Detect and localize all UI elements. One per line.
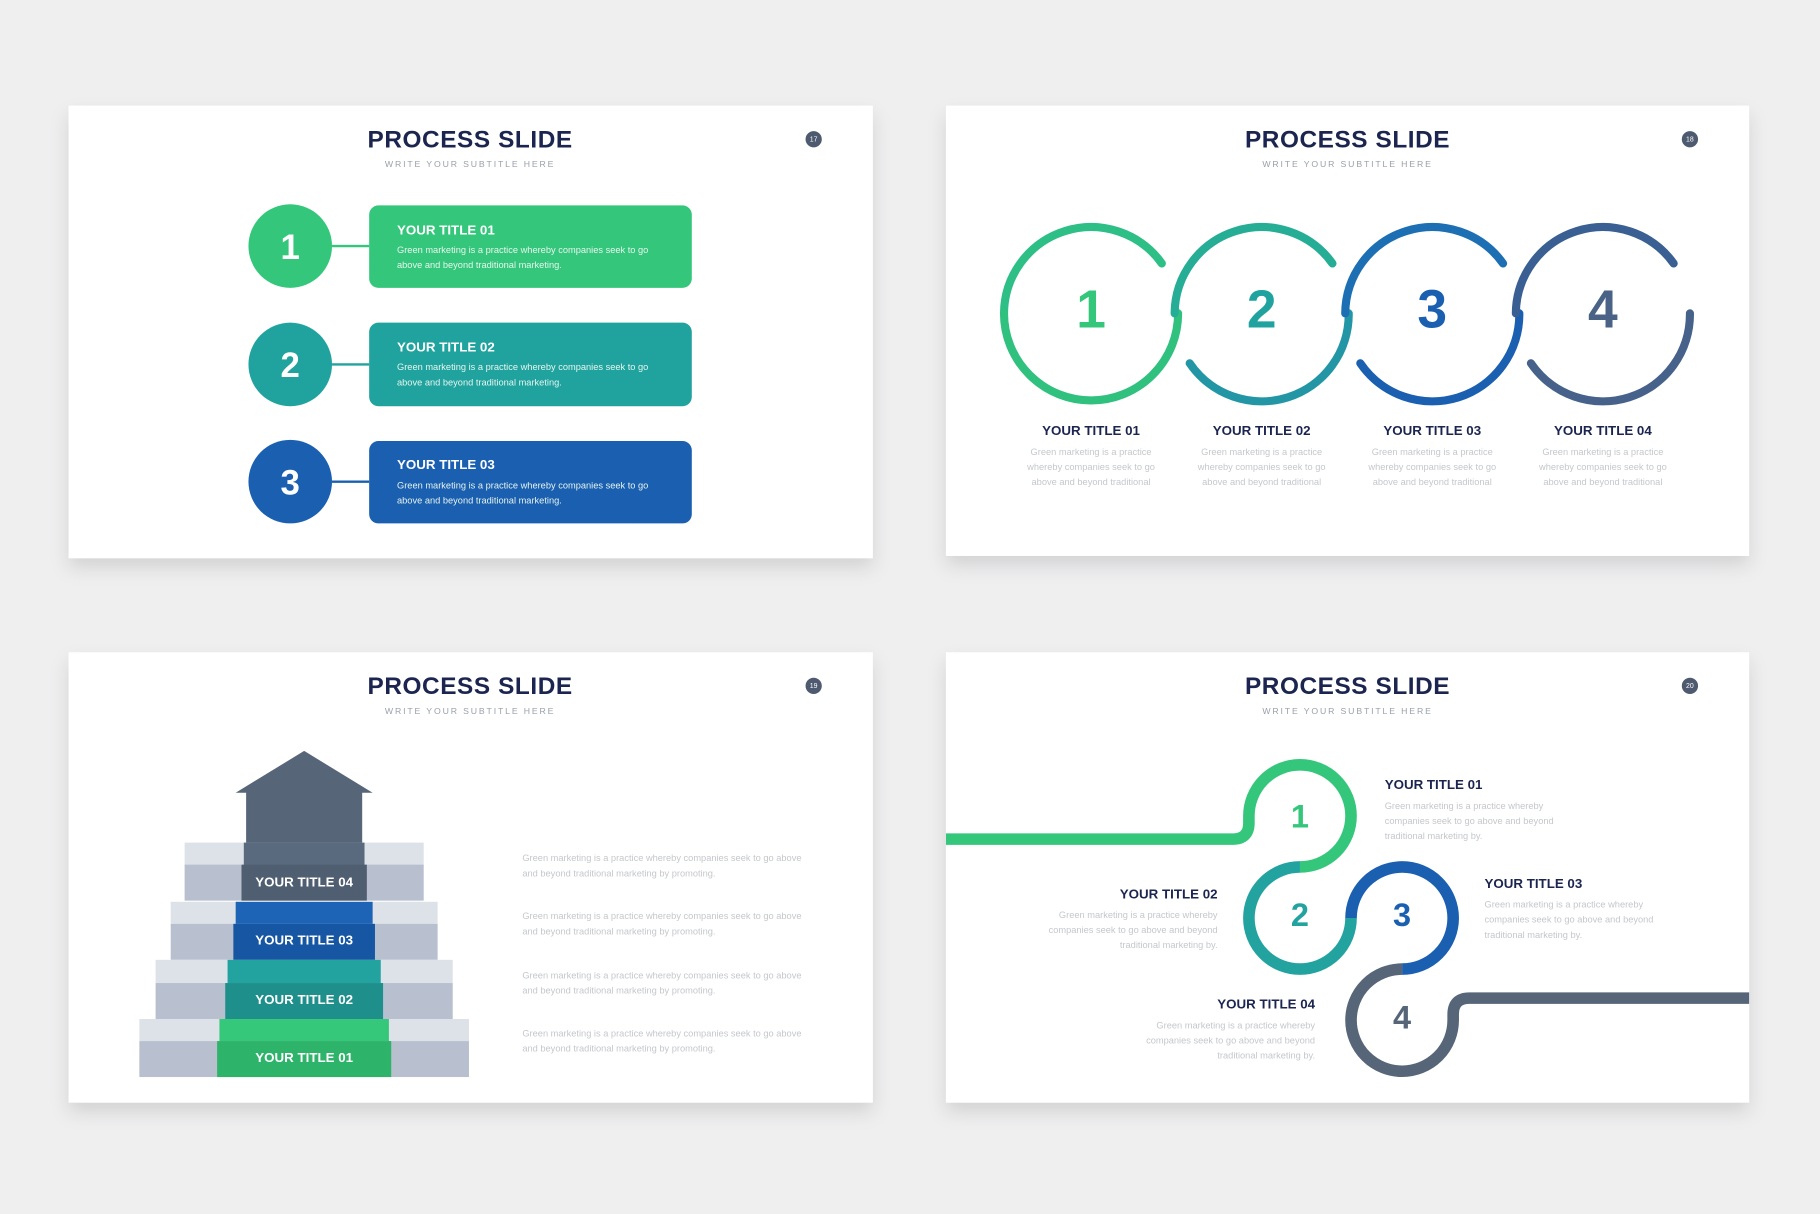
heading: slide 17: PROCESS SLIDE (368, 126, 573, 153)
heading: slide 18: PROCESS SLIDE (1245, 126, 1450, 153)
heading: slide 19: WRITE YOUR SUBTITLE HERE (385, 706, 555, 716)
circle captions: whereby companies seek to go (1026, 462, 1155, 472)
stairs: YOUR TITLE 02 (255, 992, 353, 1007)
path captions: Green marketing is a practice whereby (1059, 910, 1218, 920)
step 2 (248, 323, 692, 406)
path numbers (1291, 799, 1411, 1035)
path numbers: 3 (1393, 897, 1411, 933)
circle captions: whereby companies seek to go (1197, 462, 1326, 472)
page number 19 (806, 678, 822, 694)
page number 17 (806, 131, 822, 147)
circle captions: above and beyond traditional (1373, 477, 1492, 487)
circle captions: YOUR TITLE 04 (1554, 423, 1652, 438)
step 3: YOUR TITLE 03 (397, 457, 495, 472)
path captions: Green marketing is a practice whereby (1156, 1020, 1315, 1030)
path captions: traditional marketing by. (1120, 940, 1218, 950)
circle captions: above and beyond traditional (1202, 477, 1321, 487)
path captions: traditional marketing by. (1217, 1050, 1315, 1060)
circle captions: whereby companies seek to go (1367, 462, 1496, 472)
heading: slide 20: WRITE YOUR SUBTITLE HERE (1262, 706, 1433, 716)
step 3: above and beyond traditional marketing. (397, 496, 562, 506)
stair descriptions (522, 853, 802, 1054)
winding path (946, 765, 1749, 1071)
step 3: Green marketing is a practice whereby companies seek to go (397, 481, 648, 491)
step 1: Green marketing is a practice whereby companies seek to go (397, 245, 648, 255)
circle captions: Green marketing is a practice (1031, 447, 1152, 457)
page number 20 (1682, 678, 1698, 694)
step 2: 2 (281, 346, 300, 385)
circle captions: YOUR TITLE 03 (1383, 423, 1481, 438)
numbers: 3 (1417, 280, 1447, 339)
page number 18: 18 (1686, 137, 1694, 144)
heading: slide 19 (368, 673, 573, 716)
icon: arrow up (236, 751, 373, 865)
circle captions: YOUR TITLE 02 (1213, 423, 1311, 438)
step 1: above and beyond traditional marketing. (397, 260, 562, 270)
stair descriptions: and beyond traditional marketing by promoting. (522, 926, 716, 936)
heading: slide 20: PROCESS SLIDE (1245, 673, 1450, 700)
circle captions: Green marketing is a practice (1542, 447, 1663, 457)
path numbers: 1 (1291, 799, 1309, 835)
step 3: 3 (281, 463, 300, 502)
heading: slide 18 (1245, 126, 1450, 169)
panel: slide 17 numbered list (69, 106, 873, 558)
stair descriptions: and beyond traditional marketing by promoting. (522, 985, 716, 995)
step 3 (248, 440, 692, 523)
circle captions: above and beyond traditional (1032, 477, 1151, 487)
path captions: YOUR TITLE 04 (1217, 997, 1316, 1012)
stairs: YOUR TITLE 01 (255, 1050, 354, 1065)
stair descriptions: and beyond traditional marketing by promoting. (522, 1044, 716, 1054)
step 2: above and beyond traditional marketing. (397, 377, 562, 387)
heading: slide 18: WRITE YOUR SUBTITLE HERE (1262, 159, 1433, 169)
path captions: Green marketing is a practice whereby (1485, 900, 1643, 910)
panel: slide 18 circles (946, 106, 1749, 556)
circle captions: Green marketing is a practice (1201, 447, 1322, 457)
path captions: companies seek to go above and beyond (1385, 816, 1554, 826)
circle captions: Green marketing is a practice (1372, 447, 1493, 457)
path captions: companies seek to go above and beyond (1049, 925, 1218, 935)
path captions: traditional marketing by. (1485, 930, 1582, 940)
page number 19: 19 (810, 683, 818, 690)
path captions: YOUR TITLE 03 (1485, 876, 1582, 891)
step 1: 1 (281, 228, 300, 267)
numbers: 1 (1076, 280, 1106, 339)
stair descriptions: Green marketing is a practice whereby companies seek to go above (522, 911, 802, 921)
heading: slide 17 (368, 126, 573, 169)
circle chain (1004, 227, 1690, 401)
stairs: YOUR TITLE 04 (255, 875, 354, 890)
stairs: YOUR TITLE 03 (255, 933, 353, 948)
numbers: 4 (1588, 280, 1618, 339)
page number 17: 17 (810, 137, 818, 144)
numbers (1076, 280, 1618, 339)
stair descriptions: Green marketing is a practice whereby companies seek to go above (522, 853, 802, 863)
circle captions: whereby companies seek to go (1538, 462, 1667, 472)
step 2: YOUR TITLE 02 (397, 340, 495, 355)
page number 20: 20 (1686, 683, 1694, 690)
path numbers: 4 (1393, 999, 1411, 1035)
stair descriptions: Green marketing is a practice whereby companies seek to go above (522, 1028, 802, 1038)
stairs (139, 843, 469, 1077)
page number 18 (1682, 131, 1698, 147)
circle captions: YOUR TITLE 01 (1042, 423, 1141, 438)
circle captions (1026, 423, 1667, 487)
path captions: companies seek to go above and beyond (1146, 1035, 1315, 1045)
heading: slide 20 (1245, 673, 1450, 716)
stair descriptions: Green marketing is a practice whereby companies seek to go above (522, 970, 802, 980)
step 1: YOUR TITLE 01 (397, 222, 495, 237)
panel: slide 20 winding path (946, 652, 1749, 1103)
panel: slide 19 stairs (69, 652, 873, 1103)
path captions (1049, 777, 1653, 1060)
path captions: YOUR TITLE 01 (1385, 777, 1483, 792)
numbers: 2 (1247, 280, 1277, 339)
path captions: companies seek to go above and beyond (1485, 915, 1653, 925)
heading: slide 17: WRITE YOUR SUBTITLE HERE (385, 159, 555, 169)
stair descriptions: and beyond traditional marketing by promoting. (522, 868, 716, 878)
path captions: YOUR TITLE 02 (1120, 886, 1218, 901)
path captions: Green marketing is a practice whereby (1385, 801, 1544, 811)
path captions: traditional marketing by. (1385, 831, 1482, 841)
path numbers: 2 (1291, 897, 1309, 933)
step 2: Green marketing is a practice whereby companies seek to go (397, 362, 648, 372)
heading: slide 19: PROCESS SLIDE (368, 673, 573, 700)
step 1 (248, 204, 692, 288)
circle captions: above and beyond traditional (1543, 477, 1662, 487)
